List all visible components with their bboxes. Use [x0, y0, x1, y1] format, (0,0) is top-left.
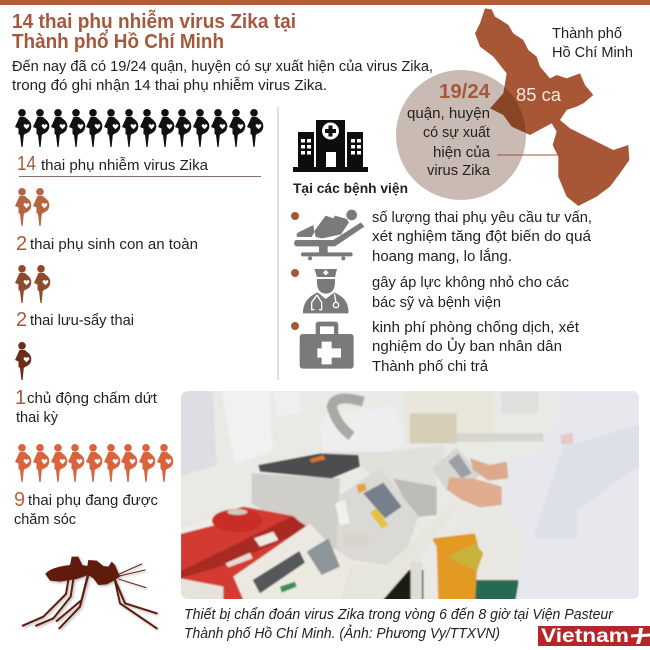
callout text: 19/24 [439, 81, 491, 103]
red machine [181, 506, 300, 599]
map shape [475, 8, 629, 206]
heading: at hospitals: Tại các bệnh viện [293, 180, 408, 196]
text: số lượng thai phụ yêu cầu tư vấn, [372, 209, 592, 226]
pictogram: 14 infected pregnant women [15, 109, 263, 147]
stat: 2 miscarriages [16, 309, 134, 331]
text: nghiệm do Ủy ban nhân dân [372, 337, 562, 355]
stat: 1 termination: thai kỳ [16, 409, 58, 426]
lab coat [502, 387, 643, 603]
orange bin [432, 533, 478, 603]
icon: hospital [293, 120, 368, 172]
below table wall [457, 510, 527, 580]
text: xét nghiệm tăng đột biến do quá [372, 228, 592, 245]
stat: 2 miscarriages: thai lưu-sẩy thai [30, 312, 134, 329]
photo caption [184, 607, 614, 642]
table [382, 538, 435, 599]
text [372, 274, 569, 311]
callout text: hiện của [433, 144, 491, 161]
stat: 9 under care: 9 [14, 489, 25, 511]
callout text: virus Zika [427, 162, 491, 179]
divider [277, 107, 279, 380]
photo caption: Thành phố Hồ Chí Minh. (Ảnh: Phương Vy/TTXVN) [184, 624, 500, 642]
point 3: funding [291, 319, 580, 375]
icon: patient on bed [294, 210, 364, 260]
stat: 9 under care: chăm sóc [14, 511, 76, 528]
stat: 14 infected: 14 [17, 153, 36, 175]
stat: 1 termination: 1 [15, 387, 26, 409]
rear base [326, 446, 444, 490]
callout circle [396, 70, 526, 200]
point 1: surge in requests [291, 209, 592, 265]
text: Thành phố chi trả [372, 358, 489, 375]
stat: 9 under care: thai phụ đang được [28, 492, 158, 509]
text: gây áp lực không nhỏ cho các [372, 274, 569, 291]
callout text: có sự xuất [423, 124, 491, 141]
intro text [12, 58, 433, 94]
title [12, 9, 296, 53]
intro text: Đến nay đã có 19/24 quận, huyện có sự xuất hiện của virus Zika, [12, 58, 433, 75]
icon: doctor [303, 269, 348, 313]
top bar [0, 0, 650, 5]
text [372, 209, 592, 265]
stat: 9 under care [14, 489, 158, 528]
map label: Hồ Chí Minh [552, 44, 633, 61]
photo caption: Thiết bị chẩn đoán virus Zika trong vòng 6 đến 8 giờ tại Viện Pasteur [184, 607, 614, 623]
title: 14 thai phụ nhiễm virus Zika tại [12, 9, 296, 33]
callout text: quận, huyện [407, 105, 490, 122]
stat: 14 infected: thai phụ nhiễm virus Zika [41, 157, 209, 174]
stat: 1 termination [15, 387, 158, 426]
callout text [407, 81, 491, 179]
stat: 2 safe births: thai phụ sinh con an toàn [30, 236, 198, 253]
point 2: pressure on doctors [291, 269, 569, 313]
text: hoang mang, lo lắng. [372, 248, 512, 265]
text [372, 319, 580, 375]
grey thermocycler [252, 473, 340, 550]
leader line [497, 154, 559, 156]
logo: Vietnam+ [538, 626, 650, 647]
bullet [291, 269, 299, 277]
text: bác sỹ và bệnh viện [372, 294, 501, 311]
pictogram: 9 under care [15, 444, 173, 482]
bullet [291, 212, 299, 220]
stat: 1 termination: chủ động chấm dứt [27, 390, 158, 407]
rear white machine [320, 406, 403, 453]
map label: Thành phố [552, 25, 623, 42]
icon: first aid kit [300, 322, 354, 369]
floor [383, 570, 423, 603]
map panel: Ho Chi Minh City [396, 8, 633, 206]
case count: 85 ca [516, 85, 562, 105]
logo: Vietnam+: Vietnam [541, 626, 629, 647]
handheld device [432, 447, 480, 490]
map label [552, 25, 633, 61]
text: kinh phí phòng chống dịch, xét [372, 319, 580, 336]
pictogram: 2 miscarriages [15, 265, 50, 303]
bullet [291, 322, 299, 330]
pictogram: 1 termination [15, 342, 31, 380]
intro text: trong đó ghi nhận 14 thai phụ nhiễm virus Zika. [12, 77, 327, 94]
pictogram: 2 safe births [15, 188, 49, 226]
stat: 2 safe births: 2 [16, 233, 27, 255]
stat: 14 infected [17, 153, 261, 176]
icon: mosquito [23, 557, 157, 628]
stat: 2 miscarriages: 2 [16, 309, 27, 331]
photo: lab equipment [177, 387, 643, 603]
title: Thành phố Hồ Chí Minh [12, 31, 224, 53]
hands [470, 458, 508, 481]
papers on wall [180, 390, 217, 476]
